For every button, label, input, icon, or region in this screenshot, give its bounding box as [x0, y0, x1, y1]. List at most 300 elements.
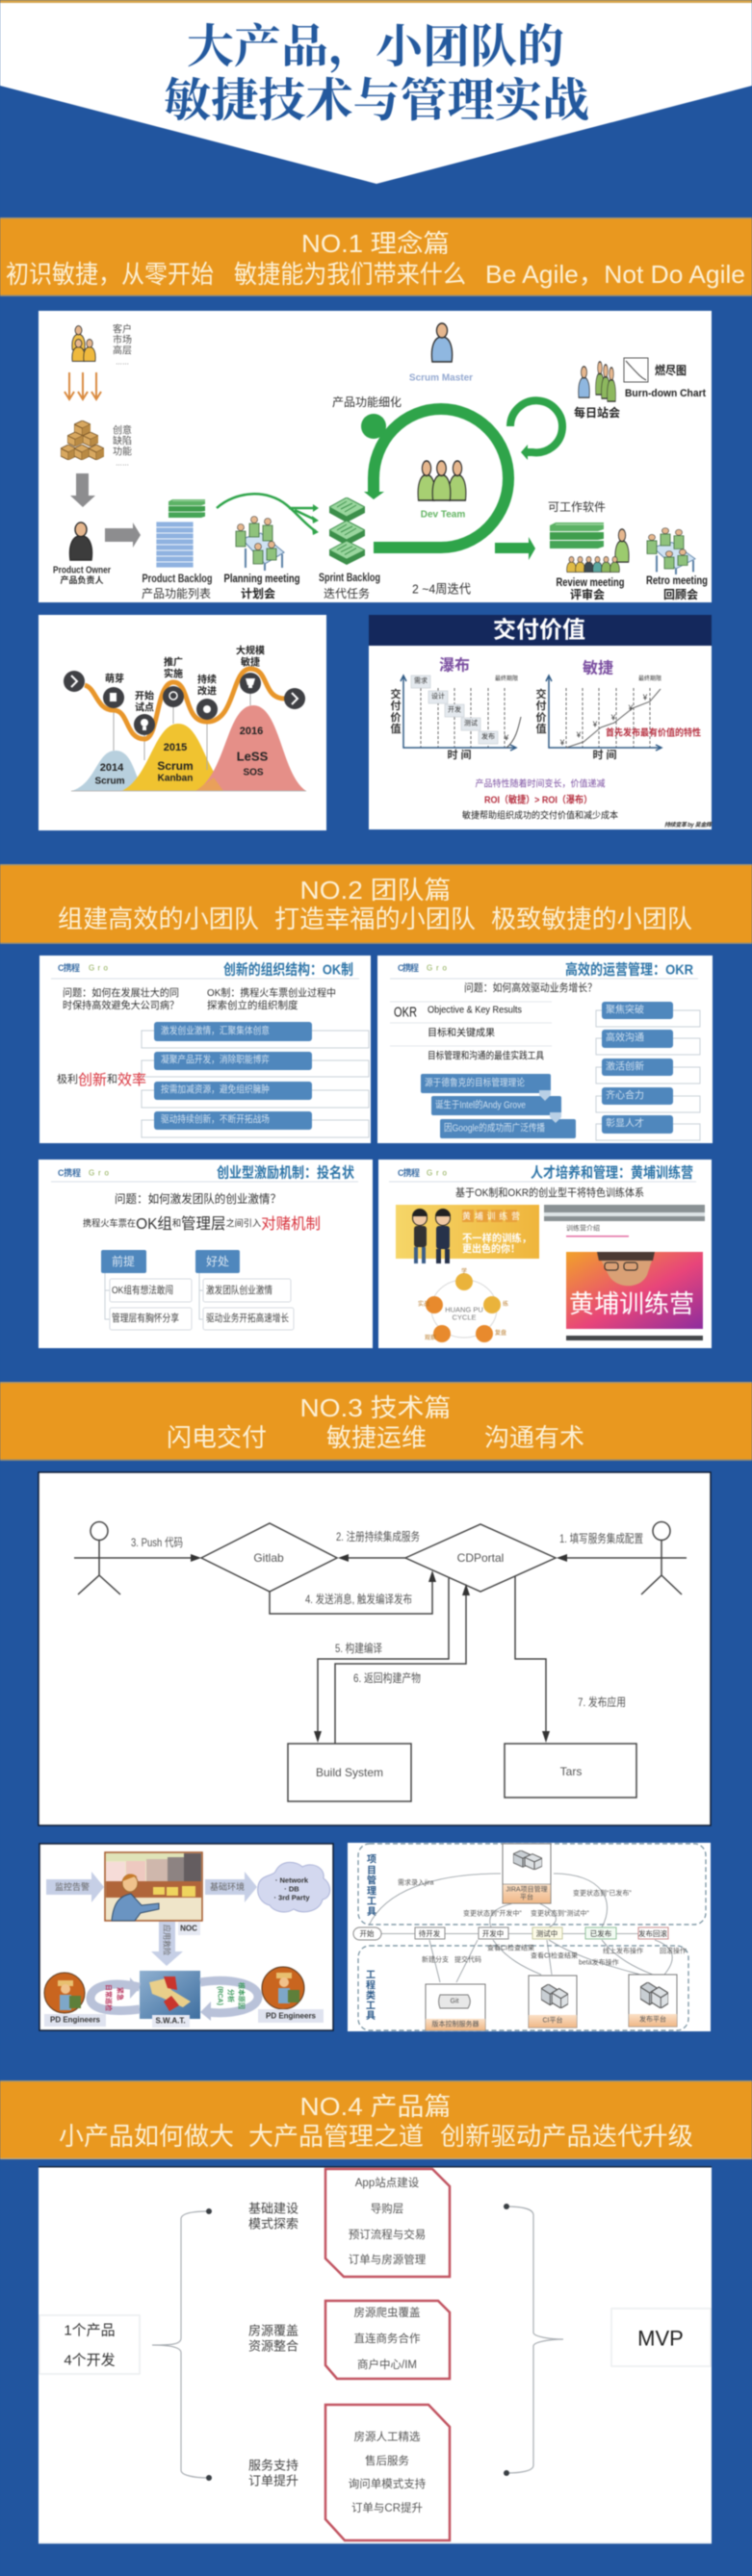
- arrow: gray right: [105, 523, 141, 548]
- label: dev team: Dev Team: [421, 510, 465, 520]
- box: MVP: [611, 2308, 711, 2366]
- label: project tools: 管: [367, 1874, 376, 1886]
- label: planning meeting: [223, 572, 300, 600]
- flow labels: 提交代码: [454, 1955, 481, 1963]
- huang pu cycle: HUANG PU: [445, 1305, 483, 1314]
- milestone labels: 持续: [197, 674, 217, 685]
- questions: 探索创立的组织制度: [207, 999, 298, 1011]
- workflow states: 待开发: [419, 1928, 441, 1938]
- arrow: monitoring: 监控告警: [55, 1881, 90, 1892]
- label: project tools: 理: [367, 1885, 376, 1897]
- box: supply features: 直连商务合作: [354, 2332, 421, 2345]
- box: infrastructure features: App站点建设: [355, 2176, 420, 2189]
- origin steps: [421, 1074, 576, 1138]
- workflow states: 开发中: [482, 1928, 504, 1938]
- chart: agile: 交: [535, 687, 547, 701]
- section band: NO.3: 沟通有术: [484, 1423, 584, 1452]
- box: service features: [325, 2405, 450, 2540]
- step labels: 1. 填写服务集成配置: [559, 1531, 643, 1545]
- cloud: [258, 1862, 330, 1912]
- premise and benefits: 管理层有胸怀分享: [112, 1312, 179, 1324]
- label: sprint backlog: 迭代任务: [324, 586, 370, 600]
- box: MVP: MVP: [637, 2327, 684, 2350]
- text block: takeaways: [462, 778, 618, 822]
- timeline ribbon: [64, 669, 305, 770]
- label: engineering tools: 具: [366, 2009, 376, 2021]
- workflow states: [353, 1927, 668, 1940]
- flow labels: 变更状态到“测试中”: [531, 1909, 589, 1917]
- label: stakeholders: 客户: [113, 323, 132, 335]
- box: infrastructure features: 订单与房源管理: [349, 2253, 427, 2266]
- chart: agile: ¥: [576, 731, 582, 739]
- box: service features: 询问单模式支持: [349, 2477, 427, 2490]
- chart labels: 2014: [100, 762, 124, 774]
- label: SWAT: [152, 2015, 190, 2028]
- logos: Gro: [89, 1168, 110, 1178]
- step labels: 7. 发布应用: [578, 1695, 626, 1709]
- label: stakeholders: 市场: [113, 333, 132, 346]
- questions: 时保持高效避免大公司病？: [63, 999, 179, 1011]
- node: CI platform: [529, 1976, 577, 2028]
- section band: NO.4: 大产品管理之道: [248, 2122, 424, 2151]
- benefits list: 凝聚产品开发，消除职能博弈: [161, 1053, 270, 1066]
- title: 大产品，小团队的: [187, 21, 564, 73]
- section band: NO.3: 闪电交付: [167, 1423, 267, 1452]
- web page preview: 训练营介绍: [566, 1224, 600, 1232]
- chart: agile: ¥: [592, 720, 598, 729]
- chart: agile: 首先发布最有价值的特性: [606, 727, 701, 739]
- workflow states: 测试中: [536, 1928, 558, 1938]
- label: product backlog: Product Backlog: [143, 572, 212, 585]
- milestone labels: 萌芽: [105, 672, 124, 685]
- banner: cartoon trainers: 更出色的你！: [462, 1242, 520, 1255]
- chart: waterfall: 需求: [414, 676, 428, 685]
- cloud: · DB: [284, 1884, 299, 1894]
- logos: [58, 962, 109, 973]
- step labels: [131, 1529, 643, 1709]
- header with title: [0, 0, 752, 184]
- panel: MVP: [39, 2166, 712, 2544]
- arrow: output: [495, 537, 535, 560]
- chart: waterfall: 付: [391, 699, 401, 712]
- panel: delivery value: [369, 615, 713, 829]
- logos: [58, 1167, 110, 1178]
- label: engineering tools: 工: [366, 1971, 376, 1980]
- node: Git server: Git: [451, 1998, 459, 2005]
- actor: developer: [74, 1522, 196, 1594]
- icon: review meeting: [567, 529, 629, 573]
- panel: agile journey: [39, 615, 326, 830]
- connectors: [191, 1554, 567, 1744]
- milestone labels: 试点: [135, 701, 154, 714]
- premise and benefits: 好处: [206, 1255, 229, 1268]
- origin steps: 因Google的成功而广泛传播: [444, 1122, 545, 1134]
- node: JIRA: [503, 1844, 551, 1903]
- icon: stakeholders: [72, 326, 95, 361]
- node: CDPortal: CDPortal: [457, 1551, 504, 1565]
- node: Gitlab: Gitlab: [253, 1551, 284, 1565]
- benefits list: 驱动持续创新，不断开拓战场: [161, 1112, 270, 1126]
- step labels: 5. 构建编译: [335, 1641, 382, 1655]
- PD engineers right: PD Engineers: [266, 2011, 317, 2021]
- cycle arrow: left: [91, 1977, 140, 2011]
- node: CI platform: CI平台: [543, 2015, 562, 2025]
- section band: NO.1: Be Agile，Not Do Agile: [485, 260, 745, 289]
- chart: waterfall: 交: [391, 687, 401, 701]
- logos: Gro: [89, 964, 109, 972]
- milestone labels: 敏捷: [241, 656, 260, 668]
- label: review meeting: Review meeting: [557, 575, 624, 589]
- statement: 携程火车票在OK组和管理层之间引入对赌机制: [83, 1214, 321, 1232]
- text block: takeaways: 敏捷帮助组织成功的交付价值和减少成本: [462, 810, 618, 822]
- heading: 交付价值: [493, 616, 585, 643]
- stage labels: 资源整合: [248, 2338, 298, 2354]
- premise and benefits: OK组有想法敢闯: [112, 1284, 173, 1296]
- flow labels: beta发布操作: [579, 1957, 619, 1967]
- chart: waterfall: ¥: [504, 733, 509, 743]
- section band: NO.2: 组建高效的小团队: [58, 905, 259, 933]
- image: NOC operator: [105, 1852, 202, 1921]
- box: infrastructure features: 导购层: [371, 2202, 403, 2215]
- milestone labels: 大规模: [236, 645, 265, 656]
- icon: scrum master: [431, 323, 453, 362]
- label: features: 功能: [113, 445, 132, 458]
- arrows: demand flow: [65, 372, 101, 399]
- section band: NO.2: NO.2 团队篇: [300, 876, 451, 905]
- node: Git server: 版本控制服务器: [431, 2019, 480, 2028]
- chart: agile: ¥: [559, 739, 565, 747]
- question: 问题：如何激发团队的创业激情？: [115, 1191, 281, 1206]
- label: sprint backlog: [319, 571, 380, 600]
- chart: waterfall: 测试: [464, 718, 478, 727]
- icon: planning meeting: [236, 516, 284, 571]
- huang pu cycle: 复盘: [495, 1329, 506, 1337]
- questions: 问题：如何在发展壮大的同: [63, 986, 179, 999]
- section band: NO.2: [0, 864, 752, 944]
- label: burndown: Burn-down Chart: [625, 388, 706, 399]
- box: service features: 订单与CR提升: [351, 2501, 423, 2514]
- icon: product backlog: [156, 499, 205, 568]
- label: planning meeting: Planning meeting: [223, 572, 300, 585]
- chart: agile: ¥: [610, 714, 616, 722]
- label: NOC: [178, 1922, 200, 1935]
- chart labels: 2015: [164, 742, 187, 753]
- chart labels: SOS: [243, 768, 264, 778]
- flow labels: 变更状态到“开发中”: [463, 1909, 522, 1917]
- label: working software: 可工作软件: [548, 500, 606, 514]
- huang pu cycle: 练: [503, 1300, 508, 1308]
- section band: NO.1: 敏捷能为我们带来什么: [234, 260, 466, 289]
- milestone labels: 实施: [164, 668, 183, 679]
- slide: OK organization: [39, 956, 371, 1143]
- cycle arrow: left: 紧急: [116, 1987, 125, 2001]
- box: supply features: 商户中心/IM: [357, 2358, 417, 2371]
- cloud: · 3rd Party: [273, 1894, 310, 1901]
- subtitle: 基于OK制和OKR的创业型干将特色训练体系: [455, 1186, 644, 1199]
- icon: dev team: [418, 461, 466, 500]
- stage labels: [248, 2202, 298, 2488]
- stage labels: 服务支持: [248, 2458, 298, 2473]
- banner: cartoon trainers: 黄埔训练营: [462, 1211, 520, 1221]
- huang pu cycle: [418, 1267, 508, 1342]
- chart: agile: 值: [535, 722, 547, 735]
- flow labels: 新建分支: [422, 1955, 449, 1963]
- callout: innovation and efficiency: 极利创新和效率: [57, 1072, 146, 1087]
- label: stakeholders: 高层: [113, 344, 132, 356]
- workflow states: 开始: [360, 1928, 375, 1938]
- label: product owner: [53, 566, 111, 585]
- huang pu cycle: CYCLE: [452, 1313, 477, 1322]
- label: SWAT: S.W.A.T.: [155, 2017, 186, 2025]
- panel: scrum process: [39, 311, 712, 602]
- label: project tools: 项: [367, 1855, 376, 1865]
- chart labels: LeSS: [237, 749, 269, 764]
- panel: incident response: [39, 1844, 333, 2030]
- label: features: 缺陷: [113, 435, 132, 446]
- PD engineers left: PD Engineers: [50, 2015, 101, 2025]
- logos: [398, 962, 448, 973]
- cycle arrow: right: (RCA): [216, 1986, 223, 2005]
- flow labels: 变更状态到“已发布”: [573, 1888, 632, 1898]
- step labels: 2. 注册持续集成服务: [336, 1529, 420, 1543]
- icon: retro meeting: [647, 528, 695, 574]
- chart labels: Scrum: [157, 759, 194, 773]
- chart: waterfall: 瀑布: [439, 656, 470, 674]
- premise and benefits: 激发团队创业激情: [206, 1284, 272, 1296]
- panel: continuous delivery diagram: [39, 1472, 711, 1825]
- stage labels: 订单提升: [248, 2473, 298, 2488]
- section band: NO.3: NO.3 技术篇: [300, 1393, 451, 1422]
- huang pu cycle: 观察: [425, 1334, 436, 1341]
- node: CDPortal: [405, 1524, 556, 1592]
- section band: NO.4: NO.4 产品篇: [300, 2092, 451, 2121]
- logos: Gro: [427, 964, 448, 972]
- icon: feature boxes: [61, 421, 104, 460]
- section band: NO.4: 小产品如何做大: [59, 2122, 234, 2151]
- heading: [369, 615, 712, 646]
- box: service features: 房源人工精选: [354, 2430, 421, 2443]
- node: Build System: Build System: [316, 1766, 383, 1779]
- arrow: emergency: 应用救险: [162, 1925, 171, 1955]
- chart: waterfall: 价: [391, 711, 401, 724]
- logos: C携程: [58, 962, 80, 973]
- video: training camp: 黄埔训练营: [569, 1289, 694, 1318]
- slide title: 创新的组织结构：OK制: [223, 960, 353, 978]
- premise and benefits: 驱动业务开拓高速增长: [206, 1312, 289, 1324]
- stage labels: 基础建设: [248, 2202, 298, 2215]
- node: Gitlab: [201, 1523, 337, 1592]
- slide title: 人才培养和管理：黄埔训练营: [531, 1164, 693, 1182]
- chart: agile: [535, 660, 701, 761]
- arrow: infrastructure: [205, 1872, 257, 1902]
- workflow states: 已发布: [590, 1928, 612, 1938]
- label: engineering tools: 程: [366, 1978, 376, 1991]
- label: features: [113, 423, 132, 468]
- section band: NO.1: [0, 217, 752, 296]
- workflow states: 发布回滚: [638, 1928, 667, 1938]
- arrow: emergency: [151, 1922, 183, 1966]
- section band: NO.1: NO.1 理念篇: [301, 229, 450, 258]
- slide: OKR: [377, 956, 713, 1143]
- benefits list: 高效沟通: [606, 1032, 644, 1043]
- label: retro meeting: Retro meeting: [646, 574, 708, 587]
- milestone labels: 推广: [164, 656, 183, 668]
- logos: [398, 1167, 448, 1178]
- chart: waterfall: 最终期限: [495, 675, 518, 682]
- label: burndown: [625, 363, 706, 399]
- label: project tools: 目: [367, 1864, 376, 1875]
- chart labels: [94, 726, 269, 787]
- origin steps: 诞生于Intel的Andy Grove: [435, 1099, 526, 1110]
- box: service features: 售后服务: [365, 2454, 409, 2467]
- label: retro meeting: 回顾会: [663, 587, 698, 601]
- huang pu cycle: 实战: [418, 1300, 429, 1308]
- origin steps: 源于德鲁克的目标管理理论: [425, 1076, 525, 1089]
- PD engineers left: [44, 1973, 106, 2027]
- chart: agile: 时 间: [592, 748, 617, 761]
- icon: product owner: [69, 523, 92, 560]
- box: team size: 1个产品: [64, 2323, 116, 2338]
- milestone labels: 改进: [197, 685, 217, 697]
- benefits list: 彰显人才: [606, 1116, 644, 1130]
- benefits list: 激活创新: [606, 1060, 644, 1072]
- chart: agile: 价: [535, 711, 547, 724]
- cycle arrow: left: 日常巡检: [104, 1984, 114, 2011]
- cloud: · Network: [275, 1876, 309, 1884]
- label: sprint backlog: Sprint Backlog: [319, 571, 380, 584]
- chart: waterfall: 值: [391, 722, 401, 735]
- label: review meeting: 评审会: [570, 587, 605, 601]
- chart: waterfall: 时 间: [447, 748, 472, 761]
- sprint loop: [361, 409, 508, 548]
- label: product backlog: 产品功能列表: [142, 587, 211, 600]
- box: infrastructure features: [325, 2169, 450, 2277]
- credit: 持续变革 by 吴金辉: [664, 821, 713, 829]
- OKR definition: 目标管理和沟通的最佳实践工具: [428, 1049, 544, 1062]
- section band: NO.1: 初识敏捷，从零开始: [6, 260, 214, 289]
- step labels: 4. 发送消息, 触发编译发布: [305, 1592, 412, 1606]
- OKR definition: 目标和关键成果: [428, 1026, 495, 1039]
- step labels: 3. Push 代码: [131, 1536, 183, 1549]
- banner: cartoon trainers: 不一样的训练，: [462, 1232, 532, 1244]
- huang pu cycle: 学: [461, 1267, 467, 1275]
- chart: agile: ¥: [628, 704, 634, 712]
- label: scrum master: Scrum Master: [409, 373, 473, 383]
- chart: agile: 敏捷: [583, 660, 613, 677]
- left brace: [152, 2208, 212, 2481]
- cycle arrow: right: 根本原因: [237, 1982, 246, 2009]
- title: 敏捷技术与管理实战: [164, 75, 589, 127]
- flow labels: 回滚操作: [660, 1946, 687, 1955]
- slide: incentive: [39, 1160, 373, 1348]
- label: features: 创意: [113, 423, 132, 437]
- label: daily standup: 每日站会: [574, 405, 620, 420]
- box: team size: [39, 2315, 140, 2374]
- section band: NO.4: 创新驱动产品迭代升级: [440, 2122, 693, 2151]
- OKR definition: Objective & Key Results: [428, 1005, 522, 1016]
- node: Git server: [426, 1984, 485, 2030]
- chart labels: 2016: [240, 726, 263, 737]
- chart: bell curves: [71, 705, 306, 791]
- logos: C携程: [398, 962, 419, 973]
- video: training camp: [566, 1252, 703, 1340]
- slide title: 高效的运营管理：OKR: [565, 960, 693, 978]
- benefits list: [142, 1022, 369, 1137]
- stage labels: 房源覆盖: [248, 2323, 298, 2338]
- node: JIRA: JIRA项目管理: [506, 1884, 548, 1894]
- chart: waterfall: 开发: [448, 704, 461, 714]
- label: product backlog: [142, 572, 212, 600]
- label: project tools: 工: [367, 1897, 376, 1907]
- box: infrastructure features: 预订流程与交易: [349, 2228, 426, 2241]
- arrow: gray down: [70, 473, 95, 507]
- chart labels: Scrum: [94, 776, 125, 787]
- web page preview: [544, 1205, 705, 1237]
- logos: C携程: [58, 1167, 81, 1178]
- box: supply features: [325, 2301, 450, 2379]
- image: SWAT: [140, 1971, 200, 2019]
- icon: increment: [550, 523, 604, 548]
- cycle arrow: right: 分析: [227, 1989, 235, 2002]
- node: Build System: [288, 1744, 411, 1801]
- node: release platform: 发布平台: [639, 2015, 666, 2023]
- label: stakeholders: ……: [116, 360, 129, 366]
- questions: OK制：携程火车票创业过程中: [207, 986, 336, 999]
- daily loop: [510, 400, 562, 460]
- flow labels: [398, 1878, 687, 1967]
- benefits list: 按需加减资源，避免组织臃肿: [161, 1084, 270, 1095]
- label: burndown: 燃尽图: [655, 363, 687, 377]
- panel: toolchain workflow: [348, 1843, 711, 2031]
- premise and benefits: [101, 1250, 294, 1330]
- cycle arrow: right: [200, 1980, 258, 2021]
- box: team size: 4个开发: [64, 2352, 116, 2369]
- chart: agile: 最终期限: [638, 675, 661, 682]
- section band: NO.2: 打造幸福的小团队: [274, 905, 476, 933]
- actor: admin: [564, 1522, 687, 1594]
- icon: daily standup: [579, 362, 615, 401]
- icon: sprint backlog: [329, 497, 365, 565]
- flow labels: 查看CI检查结果: [531, 1951, 578, 1959]
- flow curves: [369, 1874, 672, 1982]
- arrow: monitoring: [46, 1872, 104, 1902]
- benefits list: [596, 1002, 700, 1140]
- label: refine: 产品功能细化: [332, 395, 402, 409]
- text block: takeaways: ROI（敏捷）> ROI（瀑布）: [484, 793, 592, 806]
- label: features: ……: [116, 460, 129, 468]
- flow labels: 查看CI检查结果: [487, 1944, 534, 1951]
- title: [164, 21, 589, 127]
- label: retro meeting: [646, 574, 708, 601]
- milestone labels: [105, 645, 265, 714]
- chart: waterfall: 发布: [481, 731, 495, 741]
- section band: NO.2: 极致敏捷的小团队: [491, 905, 692, 933]
- section band: NO.3: 敏捷运维: [326, 1423, 427, 1452]
- chart labels: Kanban: [158, 774, 193, 783]
- icon: burndown chart: [624, 358, 648, 382]
- question: 问题：如何高效驱动业务增长？: [464, 981, 597, 994]
- slide: talent training: [378, 1160, 712, 1348]
- flow labels: 线上发布操作: [603, 1946, 643, 1955]
- chart: waterfall: [391, 656, 521, 761]
- logos: Gro: [427, 1168, 448, 1178]
- milestone labels: 开始: [135, 689, 154, 702]
- right brace: [504, 2204, 563, 2476]
- label: review meeting: [557, 575, 624, 601]
- node: Tars: Tars: [560, 1765, 582, 1778]
- node: JIRA: 平台: [520, 1892, 533, 1901]
- node: release platform: [629, 1975, 677, 2027]
